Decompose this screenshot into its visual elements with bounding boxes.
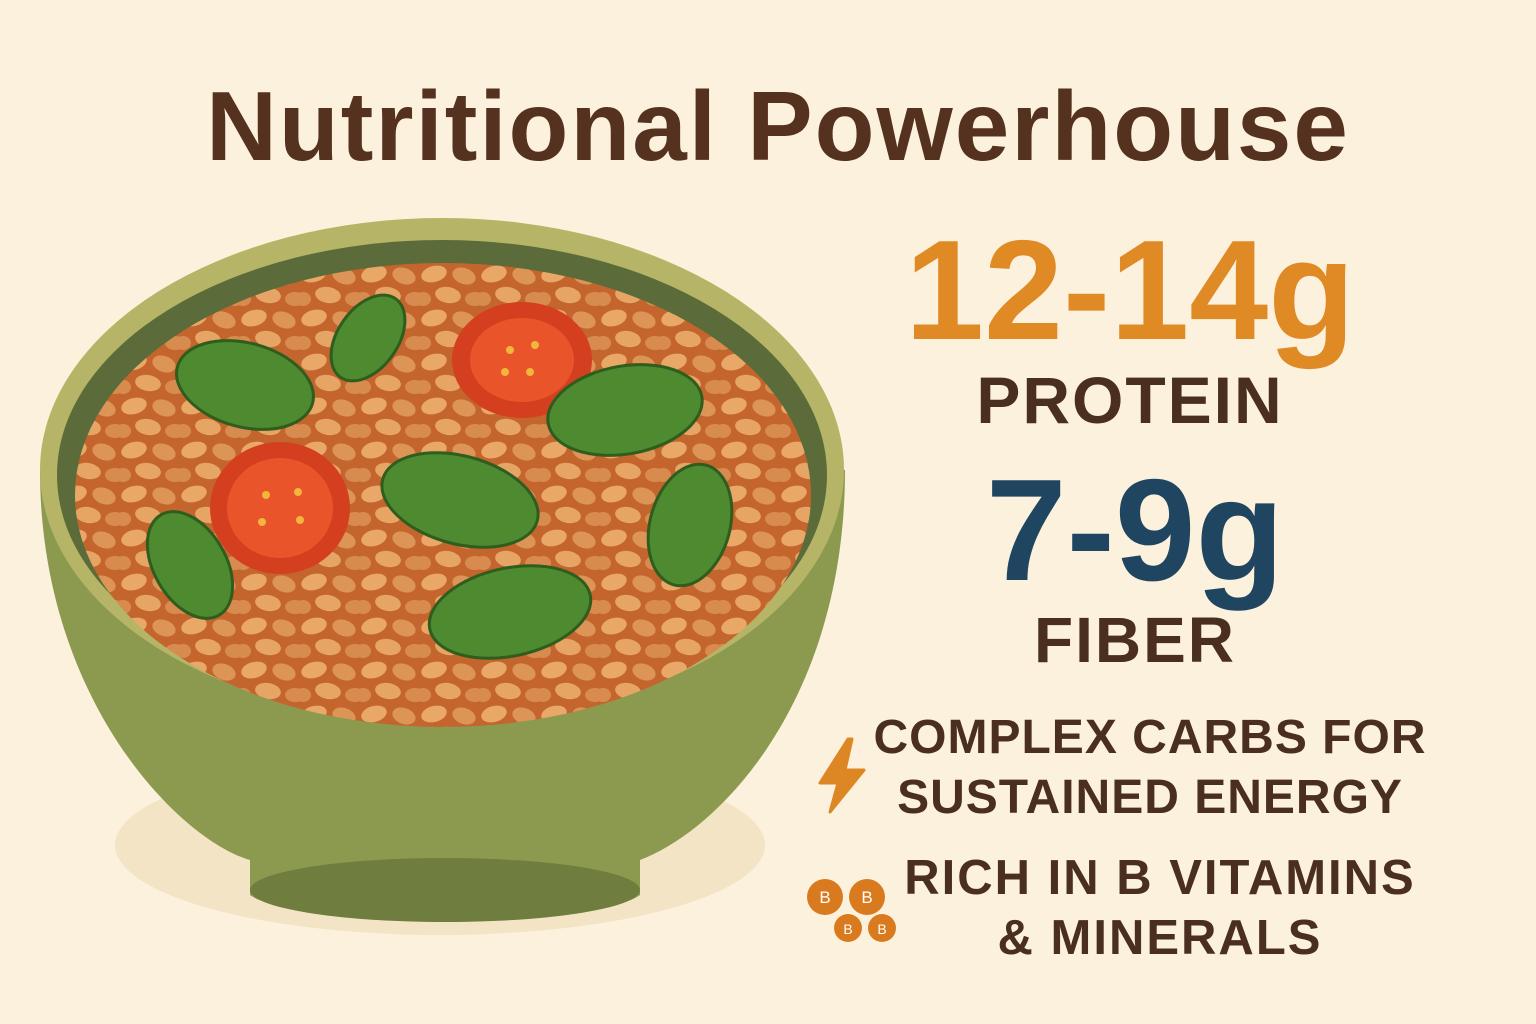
text: complex carbs xyxy=(873,711,1426,824)
rice food xyxy=(75,263,811,727)
shadow xyxy=(115,755,765,935)
leaves xyxy=(130,281,745,672)
text: complex carbs: COMPLEX CARBS FOR xyxy=(873,711,1426,764)
text: B vitamins xyxy=(904,851,1416,965)
tomatoes xyxy=(452,302,592,418)
icon: B vitamins xyxy=(807,879,896,942)
title: Nutritional Powerhouse xyxy=(206,71,1350,181)
bowl body xyxy=(40,218,845,922)
stat: fiber: 7-9g xyxy=(986,449,1284,611)
text: B vitamins: RICH IN B VITAMINS xyxy=(904,851,1416,905)
icon: B vitamins: B xyxy=(861,888,873,907)
icon: B vitamins: B xyxy=(843,921,853,937)
icon: B vitamins: B xyxy=(819,888,831,907)
stat: protein: 12-14g xyxy=(905,211,1355,370)
icon: B vitamins: B xyxy=(877,921,887,937)
text: B vitamins: & MINERALS xyxy=(998,911,1322,965)
text: complex carbs: SUSTAINED ENERGY xyxy=(897,771,1403,824)
stat: fiber: FIBER xyxy=(1034,604,1236,676)
stat: protein: PROTEIN xyxy=(976,363,1284,437)
icon: lightning xyxy=(818,738,866,814)
